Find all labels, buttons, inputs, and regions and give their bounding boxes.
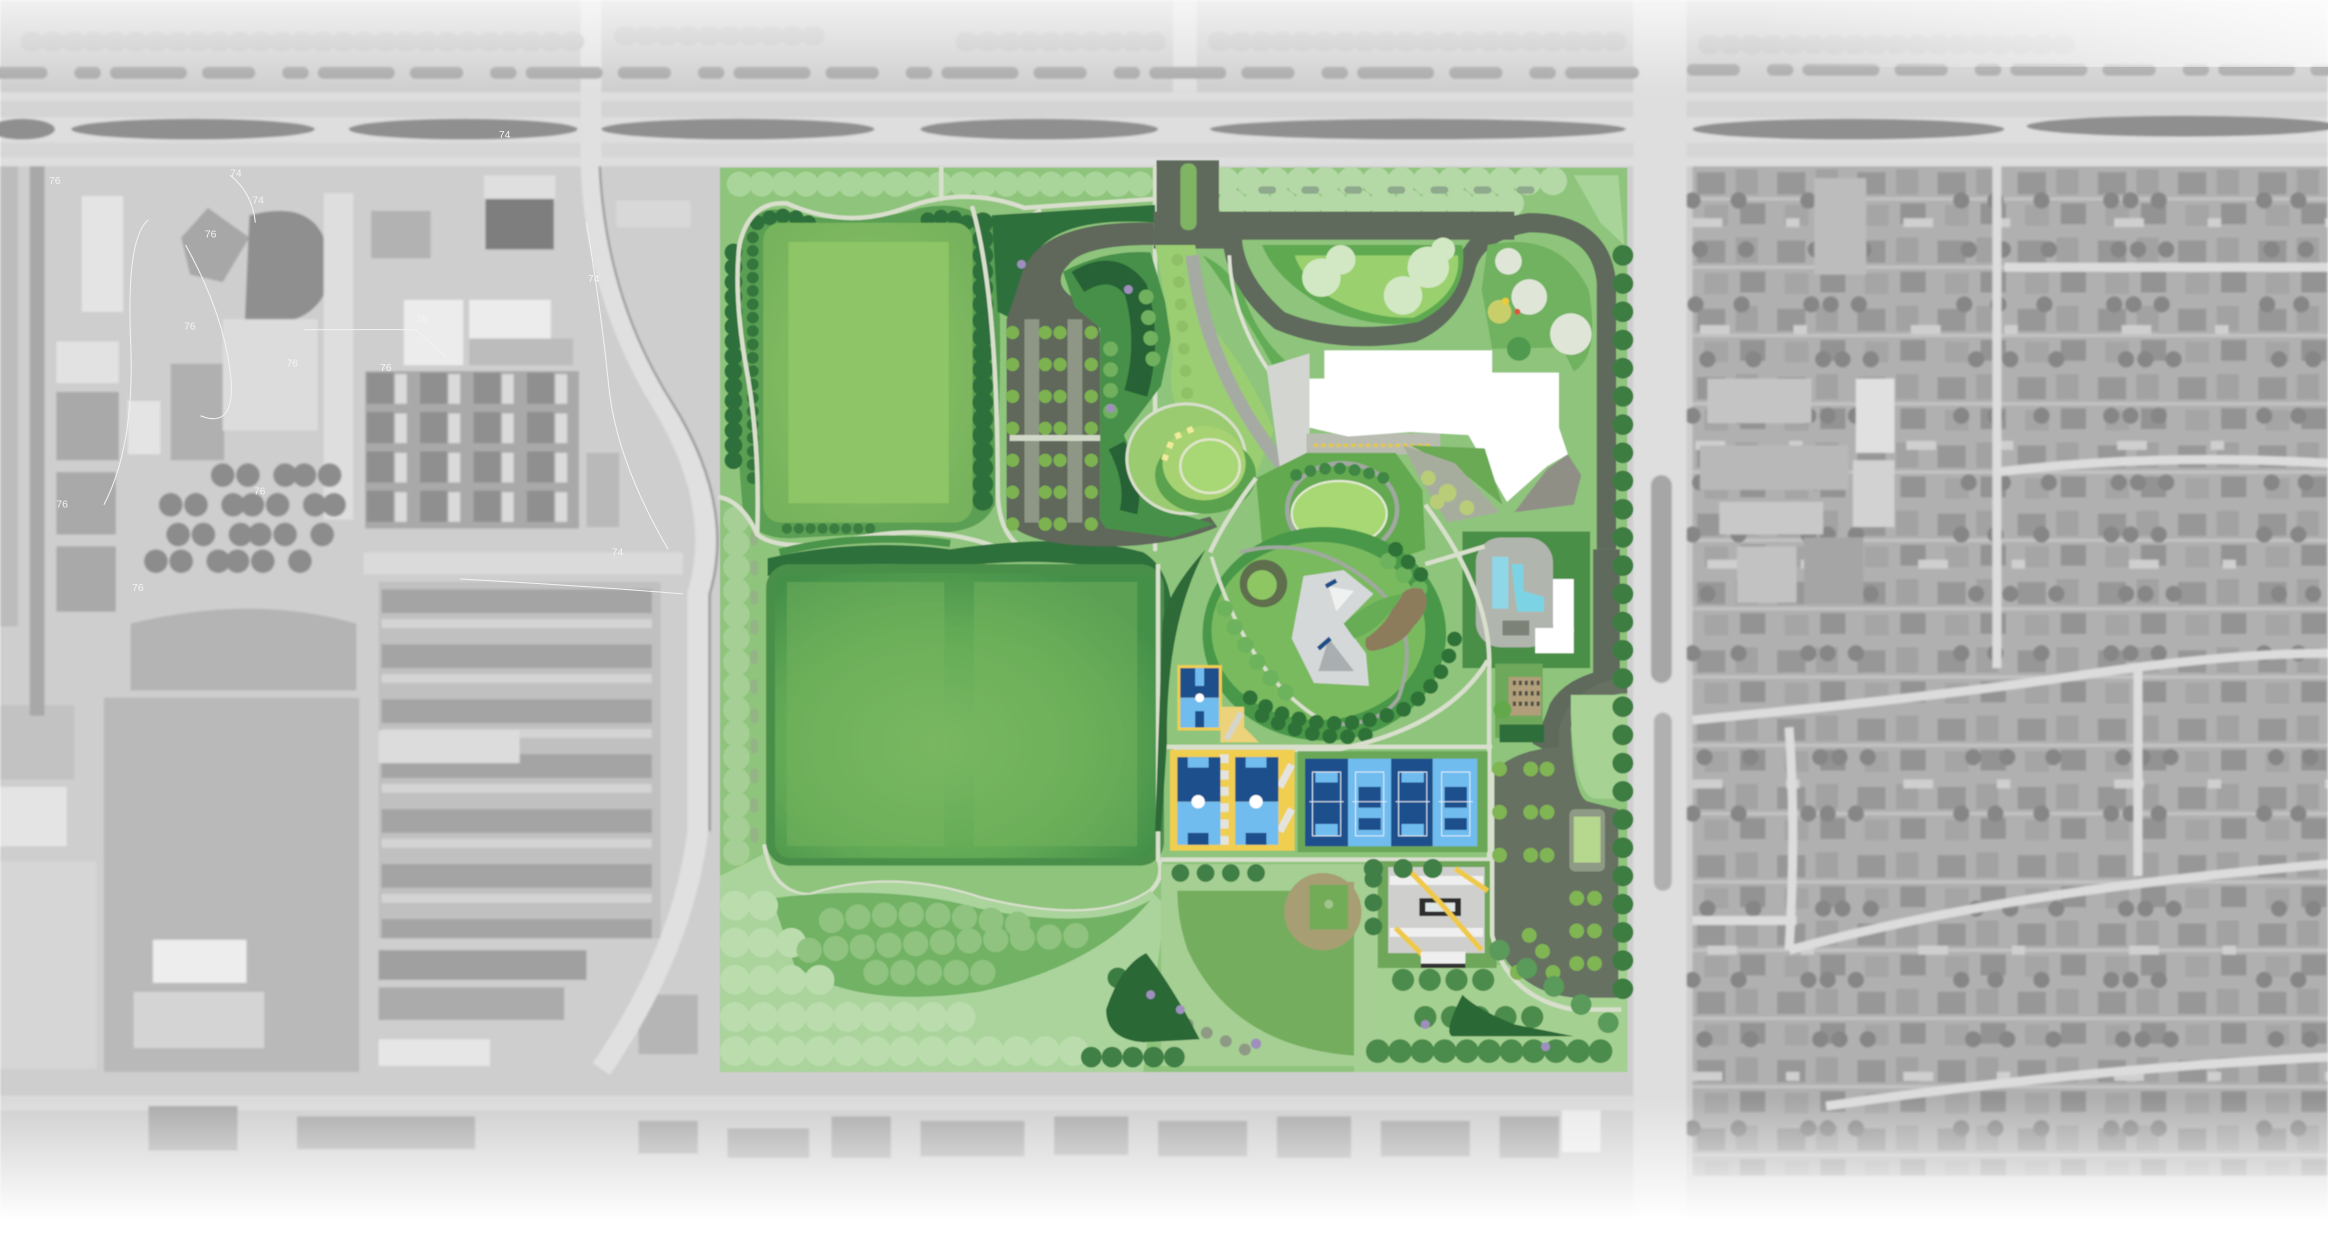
central promenade lawn bbox=[1155, 245, 1318, 475]
north half-round garden bbox=[1262, 238, 1463, 324]
tennis courts bbox=[1298, 751, 1488, 852]
right neighbourhood houses bbox=[1693, 163, 2328, 1176]
dark grove: south-east bbox=[1449, 995, 1574, 1036]
central circular lawn bbox=[1256, 453, 1425, 567]
north-east corner planting bbox=[1574, 175, 1624, 245]
basketball courts: double bbox=[1170, 750, 1295, 851]
ballfield bbox=[1161, 864, 1384, 1066]
north soccer field bbox=[733, 206, 1000, 538]
recreation pavilion bbox=[1378, 861, 1497, 968]
aquatic centre bbox=[1462, 532, 1590, 668]
left neighbourhood buildings bbox=[0, 166, 698, 1072]
north-west parking lot and drive bbox=[1007, 223, 1217, 546]
bottom strip houses bbox=[148, 1106, 1601, 1158]
elevation contours and spot labels: 76 bbox=[132, 583, 144, 594]
dark trees west bbox=[733, 216, 983, 529]
amphitheatre lawn bbox=[1127, 404, 1256, 514]
north-east playground bbox=[1482, 242, 1592, 371]
top strip parking and trees bbox=[0, 36, 2328, 73]
main entry drive and perimeter loop bbox=[1154, 160, 1606, 750]
south double soccer field bbox=[766, 564, 1164, 866]
entry median bbox=[1180, 163, 1197, 230]
dark wooded strip west of courts bbox=[1155, 549, 1206, 831]
south woodland bbox=[720, 854, 1165, 1072]
park site plan bbox=[720, 160, 1627, 1072]
path network around courts bbox=[1158, 478, 1492, 876]
elevation contours and spot labels: 76 bbox=[49, 176, 61, 187]
elevation contours and spot labels: 76 bbox=[416, 314, 427, 325]
main building bbox=[1266, 350, 1581, 512]
elevation contours and spot labels: 74 bbox=[499, 130, 511, 141]
seating pads bbox=[1164, 428, 1195, 460]
site paths bbox=[720, 168, 1161, 911]
elevation contours and spot labels: 76 bbox=[287, 359, 298, 370]
elevation contours and spot labels: 76 bbox=[184, 322, 196, 333]
elevation contours and spot labels: 76 bbox=[205, 230, 217, 241]
elevation contours and spot labels: 74 bbox=[588, 274, 600, 285]
nature play garden bbox=[1203, 527, 1458, 741]
east street trees bbox=[1616, 255, 1630, 1010]
basketball court: single bbox=[1177, 665, 1259, 742]
central dark tree belt bbox=[768, 539, 1173, 653]
elevation contours and spot labels: 76 bbox=[254, 486, 266, 497]
wedge of dark planting north-west bbox=[992, 205, 1155, 319]
tree band bbox=[736, 206, 1000, 538]
western arboretum mounds bbox=[1063, 252, 1214, 537]
sand area bbox=[1365, 588, 1427, 651]
elevation contours and spot labels: 74 bbox=[230, 169, 242, 180]
parking trees bbox=[1013, 333, 1091, 529]
elevation contours and spot labels: 74 bbox=[252, 195, 264, 206]
flowering accent trees bbox=[1017, 260, 1550, 1051]
climbing structure bbox=[1292, 570, 1373, 686]
elevation contours and spot labels: 74 bbox=[612, 547, 623, 558]
community gardens bbox=[1494, 664, 1544, 742]
south lawn trees bbox=[1091, 869, 1611, 1057]
west lawn strip trees bbox=[736, 520, 754, 854]
field turf bbox=[763, 223, 972, 523]
elevation contours and spot labels: 76 bbox=[380, 363, 392, 374]
site ground bbox=[720, 168, 1627, 1072]
elevation contours and spot labels bbox=[49, 130, 683, 594]
plaza garden bbox=[1403, 445, 1500, 523]
south-east parking lot bbox=[1492, 677, 1627, 1010]
south-east pale lawn bbox=[1354, 965, 1627, 1072]
top frontage trees bbox=[739, 181, 1574, 203]
dark grove: south-west bbox=[1106, 953, 1200, 1042]
elevation contours and spot labels: 76 bbox=[56, 500, 68, 511]
